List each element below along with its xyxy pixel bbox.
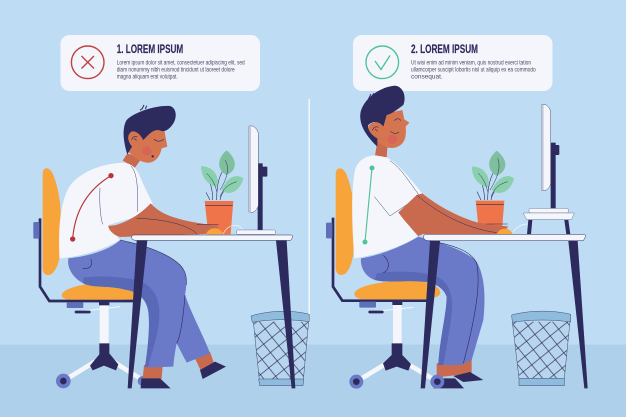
text block: description 1: Lorem ipsum dolor sit amet, consectetuer adipiscing elit, sed bbox=[117, 60, 245, 67]
text block: description 2: Ut wisi enim ad minim veniam, quis nostrud exerci tation bbox=[411, 60, 531, 67]
floor bbox=[0, 344, 626, 417]
trousers bbox=[361, 237, 484, 365]
arm and hand bbox=[108, 203, 219, 237]
plant bbox=[472, 151, 514, 226]
feet bbox=[433, 358, 483, 388]
mouse and cable bbox=[497, 224, 528, 234]
wastebasket bbox=[250, 311, 313, 386]
text block: description 1: magna aliquam erat volutpat. bbox=[117, 74, 178, 81]
front wheel bbox=[430, 375, 444, 389]
trousers bbox=[68, 240, 210, 368]
back foot bbox=[195, 352, 226, 379]
arm and hand bbox=[398, 193, 508, 236]
text block: description 2: consequat. bbox=[411, 74, 443, 81]
heading: lorem ipsum 2: 2. LOREM IPSUM bbox=[411, 44, 478, 56]
desk bbox=[128, 235, 295, 388]
text block: description 1: diam nonummy nibh euismod tincidunt ut laoreet dolore bbox=[117, 67, 235, 74]
text block: description 2: ullamcorper suscipit lobortis nisl ut aliquip ex ea commodo bbox=[411, 67, 536, 74]
mouse and cable bbox=[206, 225, 243, 234]
center divider bbox=[308, 99, 310, 323]
neck and head bbox=[360, 86, 409, 157]
keyboard bbox=[237, 230, 275, 234]
neck and head bbox=[123, 105, 176, 168]
text block: description 2 bbox=[411, 60, 536, 81]
t-shirt bbox=[59, 163, 153, 258]
keyboard on riser bbox=[523, 208, 574, 234]
icon: green check bbox=[366, 46, 399, 79]
front foot bbox=[141, 365, 171, 388]
monitor bbox=[249, 126, 267, 230]
panel: wrong posture bbox=[60, 35, 260, 91]
scene: upright person at desk bbox=[326, 86, 588, 389]
icon: red cross bbox=[71, 46, 104, 79]
chair bbox=[326, 168, 440, 389]
panel: correct posture bbox=[353, 35, 552, 91]
spine line: good posture bbox=[362, 165, 374, 244]
wastebasket bbox=[510, 311, 573, 386]
plant bbox=[201, 150, 243, 234]
text block: description 1 bbox=[117, 60, 245, 81]
t-shirt bbox=[352, 155, 422, 258]
chair bbox=[33, 168, 148, 388]
heading: lorem ipsum 1: 1. LOREM IPSUM bbox=[117, 44, 183, 56]
scene: slouching person at desk bbox=[33, 105, 313, 388]
monitor bbox=[542, 104, 559, 209]
spine curve: bad posture bbox=[70, 173, 114, 242]
desk bbox=[421, 234, 588, 388]
